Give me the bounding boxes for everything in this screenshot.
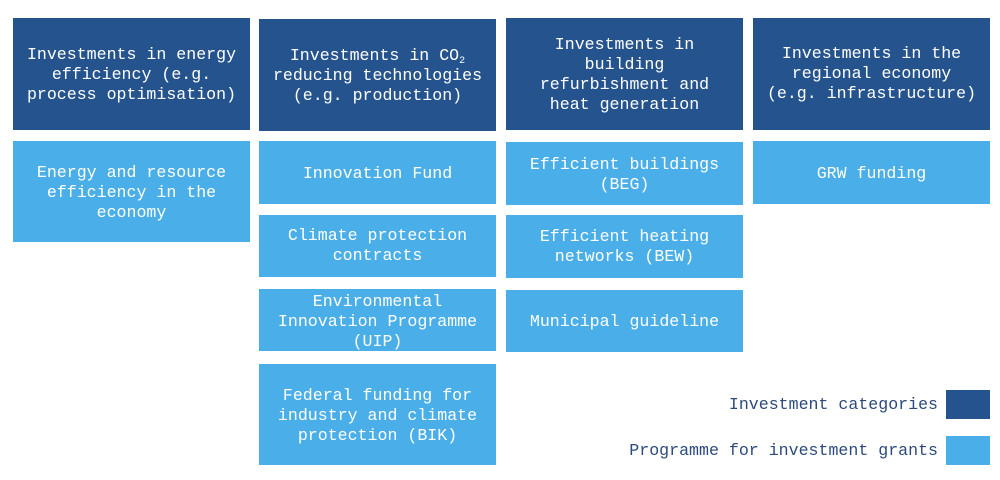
heading: investments in building refurbishment and heat generation: building [585,55,664,74]
panel: regional economy column [753,18,990,204]
programme: federal funding for industry and climate protection: industry and climate [278,406,477,424]
programme: innovation fund: Innovation Fund [303,164,452,182]
heading: investments in CO2 reducing technologies: Investments in CO2 [290,46,465,67]
programme: efficient buildings [506,142,743,205]
programme: climate protection contracts: contracts [333,246,422,265]
heading: investments in the regional economy: Investments in the [782,44,961,63]
heading: investments in energy efficiency: Investments in energy [27,45,236,64]
programme: federal funding for industry and climate protection: protection (BIK) [298,426,457,444]
programme: energy and resource efficiency: economy [97,202,166,222]
programme: GRW funding [753,141,990,204]
programme: environmental innovation programme [259,289,496,351]
programme: municipal guideline: Municipal guideline [530,312,719,331]
heading: investments in building refurbishment and heat generation: heat generation [550,95,699,114]
heading: investments in CO2 reducing technologies: reducing technologies [273,66,482,85]
programme: energy and resource efficiency [13,141,250,242]
programme: climate protection contracts [259,215,496,277]
programme: efficient buildings: Efficient buildings [530,154,719,174]
programme: efficient heating networks [506,215,743,278]
heading: investments in CO2 reducing technologies [259,19,496,131]
programme: federal funding for industry and climate protection: Federal funding for [283,386,472,404]
heading: investments in the regional economy: (e.g. infrastructure) [767,84,976,103]
programme: efficient buildings: (BEG) [600,174,649,194]
heading: investments in energy efficiency: process optimisation) [27,85,236,104]
programme: efficient heating networks: networks (BEW) [555,246,694,266]
panel: CO2 reducing technologies column [259,19,496,465]
legend swatch: investment categories [946,390,990,419]
heading: investments in energy efficiency: efficiency (e.g. [52,65,211,84]
programme: municipal guideline [506,290,743,352]
programme: environmental innovation programme: Environmental [313,292,442,310]
legend label: investment categories: Investment categories [729,395,938,414]
programme: energy and resource efficiency: efficiency in the [47,182,216,202]
programme: efficient heating networks: Efficient heating [540,226,709,246]
legend swatch: programme for investment grants [946,436,990,465]
heading: investments in building refurbishment and heat generation: refurbishment and [540,75,709,94]
programme: energy and resource efficiency: Energy and resource [37,162,226,182]
heading: investments in building refurbishment and heat generation: Investments in [555,35,694,54]
programme: GRW funding: GRW funding [817,164,926,182]
panel: energy efficiency column [13,18,250,242]
programme: climate protection contracts: Climate protection [288,226,467,245]
programme: environmental innovation programme: (UIP) [353,332,402,350]
programme: federal funding for industry and climate protection [259,364,496,465]
heading: investments in CO2 reducing technologies: (e.g. production) [293,86,462,105]
heading: investments in energy efficiency [13,18,250,130]
legend [629,390,990,465]
heading: investments in building refurbishment and heat generation [506,18,743,130]
panel: building refurbishment column [506,18,743,352]
heading: investments in the regional economy [753,18,990,130]
programme: environmental innovation programme: Innovation Programme [278,312,477,330]
legend label: programme for investment grants: Programme for investment grants [629,441,938,460]
programme: innovation fund [259,141,496,204]
heading: investments in the regional economy: regional economy [792,64,951,83]
